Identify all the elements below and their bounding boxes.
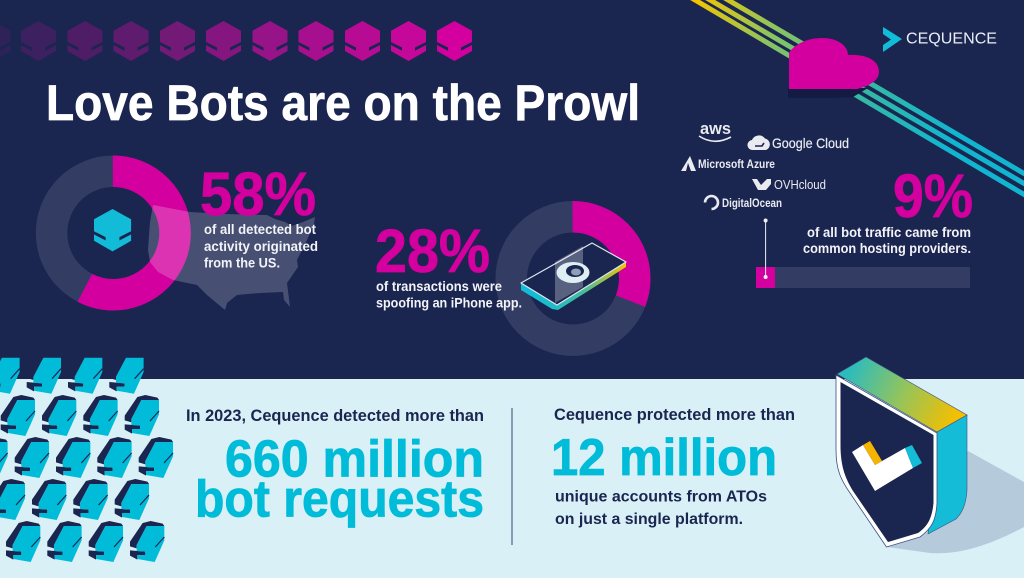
text: 58% description: of all detected bot [204, 221, 316, 237]
logo: OVHcloud: OVHcloud [774, 177, 826, 192]
text: 58% description: from the US. [204, 254, 280, 270]
logo: Microsoft Azure: Microsoft Azure [698, 157, 775, 171]
text: 9% description [803, 224, 971, 256]
donut chart: 28% [511, 217, 635, 340]
heart shape [789, 38, 879, 89]
heart shadow [788, 88, 868, 98]
bar chart: 9% [756, 218, 970, 288]
logo: OVHcloud [752, 177, 826, 192]
text: 9% description: of all bot traffic came from [807, 224, 971, 240]
text: 28% description: spoofing an iPhone app. [376, 294, 522, 310]
phone edge [521, 262, 626, 310]
shield top face [837, 357, 967, 432]
text: 58% description [204, 221, 318, 270]
shield front face [840, 382, 934, 542]
logo: Microsoft Azure [681, 156, 775, 171]
stat: 660 million bot requests: 660 million [225, 431, 484, 489]
diagonal stripes [690, 0, 1024, 198]
stat: 12 million: 12 million [551, 429, 777, 487]
phone logo [556, 262, 590, 283]
text: 28% description: of transactions were [376, 278, 502, 294]
Cequence logo [883, 27, 997, 52]
checkmark [852, 441, 922, 491]
text: 2023 intro: In 2023, Cequence detected more than [186, 407, 484, 425]
screen highlight [555, 246, 583, 303]
text: accounts description [555, 489, 767, 528]
logo chevron [883, 27, 902, 52]
text: 9% description: common hosting providers. [803, 240, 971, 256]
icon: phone [521, 243, 626, 310]
logo wordmark: CEQUENCE [906, 30, 997, 48]
title: Love Bots are on the Prowl [46, 75, 640, 131]
hosting provider logos [681, 119, 849, 210]
text: accounts description: on just a single platform. [555, 511, 743, 528]
text: 28% description [376, 278, 522, 310]
divider [511, 408, 513, 545]
logo: Google Cloud: Google Cloud [772, 135, 849, 151]
icon: shield [836, 357, 1024, 553]
text: protected intro: Cequence protected more than [554, 406, 795, 424]
text: 58% description: activity originated [204, 238, 318, 254]
logo: aws: aws [700, 119, 731, 138]
shield front border [836, 375, 937, 547]
stat: 58%: 58% [200, 160, 316, 228]
icon: cyan bot hexagon [93, 209, 132, 251]
stat: 28%: 28% [375, 217, 490, 285]
donut chart: 58% [52, 171, 175, 295]
text: accounts description: unique accounts from ATOs [555, 489, 767, 506]
logo: DigitalOcean: DigitalOcean [722, 198, 782, 210]
stat: 660 million bot requests: bot requests [195, 471, 484, 529]
decorative hexagon row [0, 21, 473, 61]
light bottom panel [0, 379, 1024, 578]
logo: DigitalOcean [705, 196, 782, 210]
shield cast shadow [887, 451, 1024, 553]
logo: Google Cloud [747, 135, 849, 151]
stat: 9%: 9% [893, 162, 973, 230]
shield side face [928, 415, 967, 534]
stat: 660 million bot requests [195, 431, 484, 529]
heart icon [788, 38, 879, 98]
isometric block pattern [0, 353, 173, 562]
phone screen [521, 243, 626, 305]
US map [148, 205, 315, 310]
